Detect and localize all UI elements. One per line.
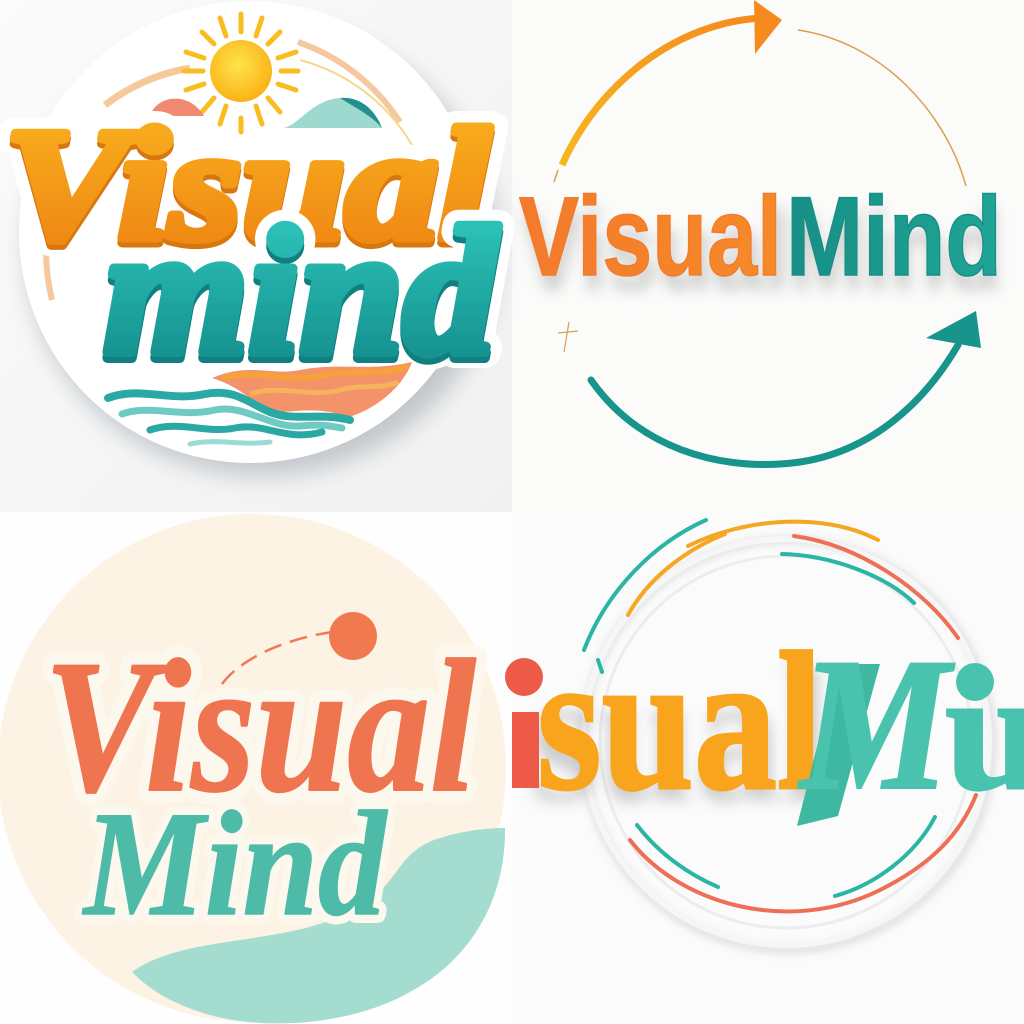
badge shadow [26, 24, 498, 476]
wordmark: mind: mind [104, 191, 499, 392]
ring relief [583, 539, 993, 950]
arrow: orange arc [562, 0, 782, 165]
wordmark: Visual: Visual [4, 95, 491, 273]
icon: coral hill [150, 99, 204, 116]
icon: orange waves [212, 362, 412, 418]
wordmark: Visual: Visual [519, 174, 782, 299]
icon: teal hill [284, 98, 382, 128]
wordmark: sual: sual [537, 612, 823, 831]
wordmark: Visual: Visual [4, 95, 491, 273]
wordmark: mind: mind [104, 191, 499, 392]
wordmark: Visual: Visual [44, 622, 476, 832]
accent arcs [584, 520, 976, 911]
arrow: teal arc [591, 311, 981, 465]
panel: sticker badge logo [4, 1, 499, 476]
wordmark: M: M [797, 620, 955, 830]
icon: teal waves [108, 393, 350, 444]
wordmark: red letter i [505, 658, 543, 788]
wordmark: Visual: Visual [44, 622, 476, 832]
panel: arrow circle logo [519, 0, 1002, 465]
badge disc [19, 1, 481, 463]
dashed trajectory [222, 632, 332, 684]
seafoam wave [132, 828, 505, 1023]
panel: 3D ring logo [505, 520, 1024, 950]
thin tick left [554, 170, 558, 182]
badge inner rings [46, 42, 412, 300]
wordmark: Mind: Mind [82, 781, 388, 947]
wordmark: mind: mind [104, 197, 499, 398]
panel: cream circle logo [0, 514, 506, 1023]
icon: sun [184, 14, 298, 132]
wordmark shadow: sual [530, 632, 830, 842]
icon: coral ball [329, 612, 377, 660]
cream disc [0, 514, 506, 1022]
small cross mark [558, 322, 578, 352]
wordmark: Visual: Visual [4, 100, 491, 278]
wordmark: Mind: Mind [82, 781, 388, 947]
thin arc upper right [798, 30, 966, 186]
